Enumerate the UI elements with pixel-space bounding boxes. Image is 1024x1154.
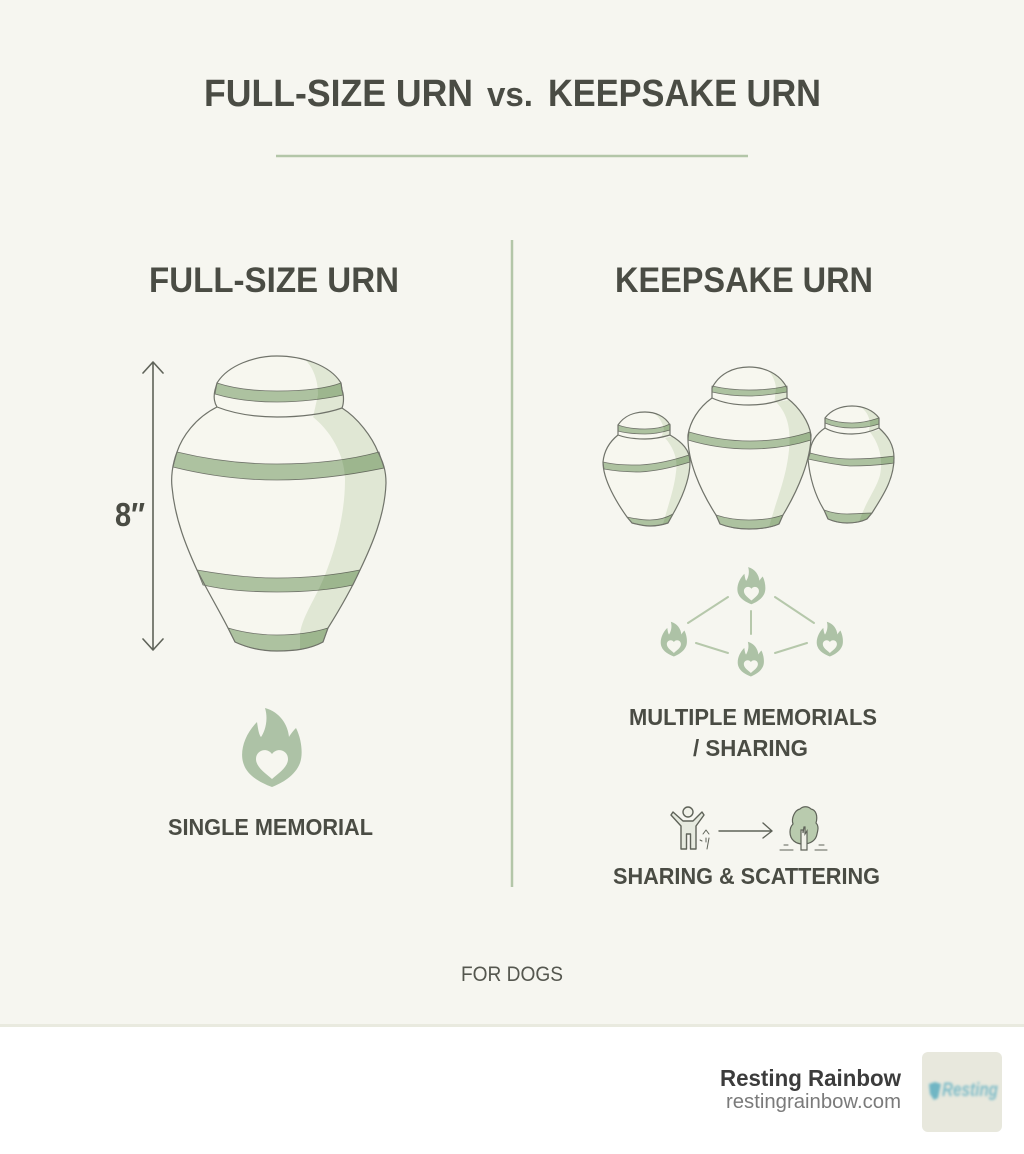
height arrow <box>143 362 163 650</box>
diagram: connected memorials <box>661 567 843 676</box>
logo <box>922 1052 1002 1132</box>
title: KEEPSAKE URN <box>548 73 821 115</box>
icon: left flame <box>661 622 687 656</box>
label: multiple memorials <box>629 704 877 761</box>
center divider <box>511 240 513 887</box>
right urn <box>808 405 900 525</box>
label: multiple memorials: MULTIPLE MEMORIALS <box>629 704 877 730</box>
title: vs. <box>487 76 533 114</box>
left urn <box>603 410 700 528</box>
icon: person scattering <box>671 807 709 849</box>
caption: for dogs: FOR DOGS <box>461 963 563 986</box>
label: sharing and scattering: SHARING & SCATTERING <box>613 863 880 889</box>
heading: keepsake urn: KEEPSAKE URN <box>615 261 873 300</box>
icon: tree <box>780 807 827 850</box>
icon: three keepsake urns <box>603 365 900 531</box>
title: FULL-SIZE URN <box>204 73 473 115</box>
icon: bottom flame <box>738 642 764 676</box>
title <box>204 73 821 115</box>
label: multiple memorials: / SHARING <box>693 735 808 761</box>
footer bar <box>0 1024 1024 1154</box>
logo: Resting <box>942 1080 998 1101</box>
panel: full-size urn <box>115 261 400 840</box>
label: single memorial: SINGLE MEMORIAL <box>168 814 373 840</box>
brand name: Resting Rainbow <box>720 1065 901 1091</box>
brand url: restingrainbow.com <box>726 1091 901 1113</box>
heading: full-size urn: FULL-SIZE URN <box>149 261 399 300</box>
title rule <box>276 155 748 157</box>
panel: keepsake urn <box>603 261 900 889</box>
arrow: person to tree <box>719 823 772 838</box>
center urn <box>688 365 820 531</box>
icon: right flame <box>817 622 843 656</box>
height label: 8″ <box>115 496 145 533</box>
icon: single memorial flame <box>242 708 302 787</box>
icon: large urn <box>172 350 400 655</box>
icon: top flame <box>737 567 765 604</box>
